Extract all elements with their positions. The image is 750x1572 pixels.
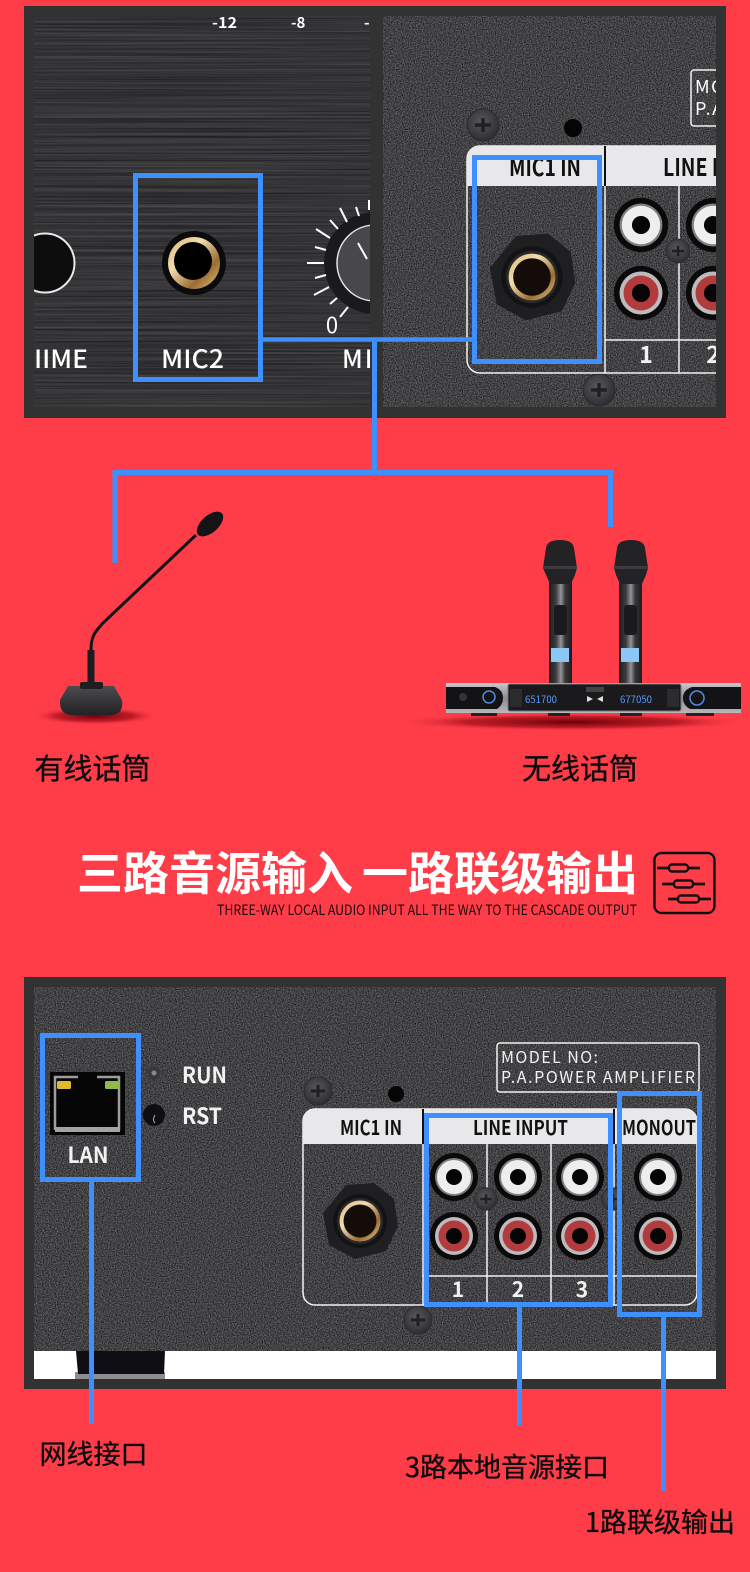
panel labels: MIC2 <box>161 340 224 376</box>
connector plate: 2 <box>512 1274 524 1304</box>
level scale numbers: -12 <box>212 12 237 33</box>
panel labels <box>36 349 370 368</box>
panel labels: MI <box>342 340 374 376</box>
icon: rca sockets <box>430 1153 682 1260</box>
label: network port: 网线接口 <box>40 1433 148 1472</box>
icon: screws and hole <box>467 109 615 406</box>
icon: lan port <box>50 1072 125 1135</box>
highlight: monout box <box>620 1094 700 1314</box>
connector plate <box>303 1109 697 1305</box>
highlight: mic1 box <box>474 158 600 362</box>
icon: rca sockets <box>614 198 716 320</box>
title: 三路音源输入 <box>77 838 353 904</box>
title: 一路联级输出 <box>362 838 638 904</box>
level scale numbers: -8 <box>291 12 306 33</box>
connector plate: MIC1 IN <box>340 1112 402 1141</box>
arrow: line input leader <box>517 1307 522 1425</box>
model box: MODEL NO: <box>501 1044 598 1068</box>
receiver body: 677050 <box>620 691 652 706</box>
highlight: line input box <box>426 1116 610 1304</box>
connector plate: MIC1 IN <box>509 148 581 183</box>
icon: reset button <box>143 1104 165 1126</box>
connector plate: 1 <box>452 1274 464 1304</box>
highlight: lan box <box>42 1036 138 1180</box>
level scale numbers <box>212 17 369 28</box>
panel: front and rear panel close-up <box>16 6 750 418</box>
icon: sliders <box>654 853 714 913</box>
icon: mic2 jack <box>162 231 226 295</box>
icon: wireless microphones and receiver <box>392 540 750 731</box>
microphone 2 <box>614 540 648 684</box>
icon: run led <box>148 1066 160 1080</box>
highlight: connection lines for mic inputs <box>115 158 610 563</box>
lan label: LAN <box>68 1138 108 1170</box>
model box <box>497 1043 699 1092</box>
icon: mic1 jack <box>490 234 575 320</box>
label: wired microphone: 有线话筒 <box>34 746 151 788</box>
icon: chime button <box>34 232 76 294</box>
arrow: monout leader <box>661 1317 666 1491</box>
rear panel: textured metal <box>383 16 750 407</box>
gain knob: 0 <box>326 308 338 340</box>
model box: P.A. <box>695 95 731 121</box>
receiver body: 651700 <box>525 691 557 706</box>
icon: mic1 jack <box>323 1183 398 1259</box>
connector plate: 2 <box>706 336 720 370</box>
highlight: mic2 box <box>136 176 260 380</box>
microphone 1 <box>543 540 577 684</box>
connector plate: LINE INPUT <box>473 1112 568 1141</box>
arrow: lan leader <box>89 1182 94 1424</box>
subtitle: THREE-WAY LOCAL AUDIO INPUT ALL THE WAY TO THE CASCADE OUTPUT <box>217 900 637 920</box>
rst label: RST <box>182 1099 222 1131</box>
label: one cascade output: 1路联级输出 <box>585 1501 735 1540</box>
label: three local inputs: 3路本地音源接口 <box>405 1446 609 1485</box>
icon: wired gooseneck microphone <box>31 507 228 725</box>
model box: P.A.POWER AMPLIFIER <box>501 1064 695 1088</box>
label: wireless microphone: 无线话筒 <box>522 746 638 788</box>
level scale numbers: - <box>364 12 370 33</box>
receiver body <box>446 683 741 716</box>
connector plate: 1 <box>639 336 653 370</box>
front panel: brushed metal <box>34 16 370 407</box>
model box <box>690 69 716 127</box>
gain knob <box>307 200 370 334</box>
highlight: rear panel boxes and leader lines <box>42 1036 700 1491</box>
panel labels: IIME <box>34 340 88 376</box>
icon: screws and hole <box>304 1077 432 1334</box>
run label: RUN <box>182 1058 227 1090</box>
connector plate: 3 <box>576 1274 588 1304</box>
white strip with speaker base <box>34 1351 716 1379</box>
connector plate <box>466 145 716 374</box>
connector plate: MONOUT <box>622 1112 696 1141</box>
panel: rear panel <box>24 977 726 1389</box>
